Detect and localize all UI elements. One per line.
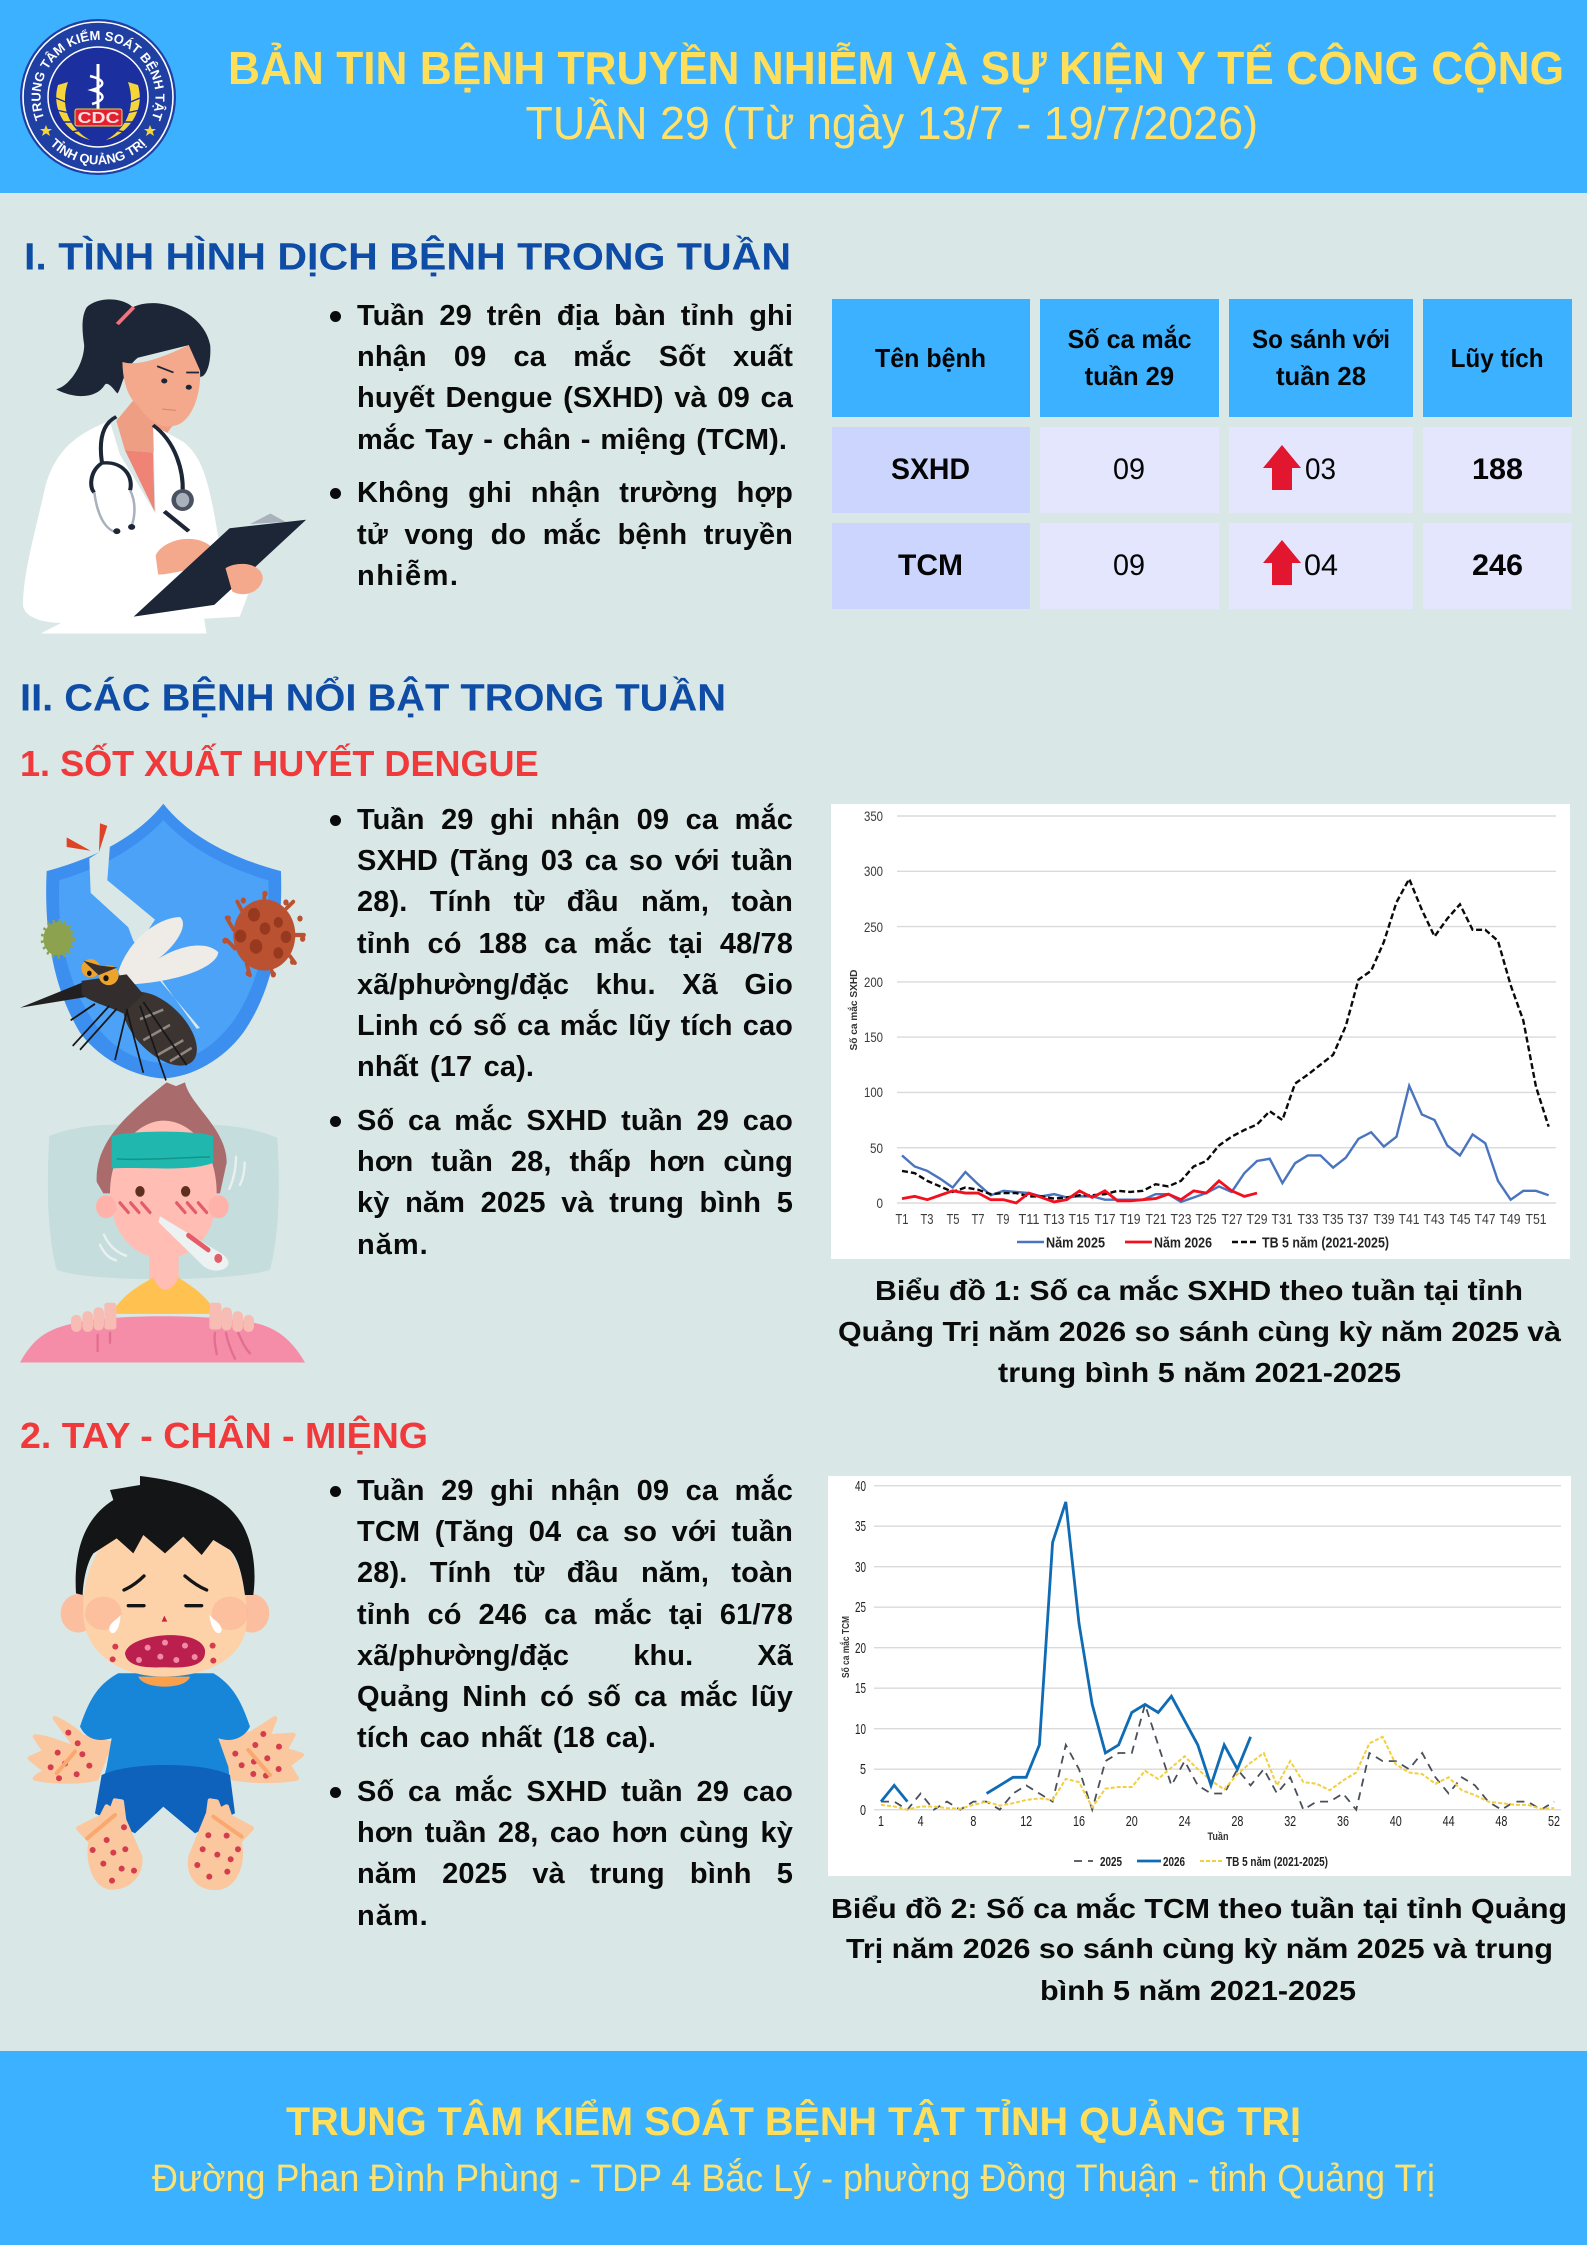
text block: weekly situation [330,300,794,592]
chart 1: SXHD weekly cases: 250 [864,919,883,935]
chart 1: SXHD weekly cases: 300 [864,863,883,879]
text block: hand foot mouth: tích cao nhất (18 ca). [357,1722,656,1754]
text block: dengue: hơn tuần 28, thấp hơn cùng [357,1146,793,1178]
chart 2: TCM weekly cases: 1 [878,1814,884,1830]
logo: CDC Quang Tri: CDC [78,110,120,127]
chart 1: SXHD weekly cases: T45 [1450,1211,1470,1228]
chart 1: SXHD weekly cases: 350 [864,808,883,824]
chart 1: SXHD weekly cases: T33 [1298,1211,1318,1228]
chart 2: TCM weekly cases: 20 [1126,1814,1138,1830]
chart 1: SXHD weekly cases: T17 [1094,1211,1116,1228]
chart 1: SXHD weekly cases: 50 [870,1140,883,1156]
text block: dengue: Tuần 29 ghi nhận 09 ca mắc [357,804,793,836]
chart 2: TCM weekly cases: 12 [1020,1814,1032,1830]
chart 2: TCM weekly cases: 24 [1179,1814,1191,1830]
footer: address: Đường Phan Đình Phùng - TDP 4 Bắc Lý - phường Đồng Thuận - tỉnh Quảng Trị [152,2157,1435,2200]
chart 2: TCM weekly cases: 44 [1443,1814,1455,1830]
table row: TCM [898,540,1523,585]
table row: SXHD: 09 [1113,453,1145,486]
text block: dengue: năm. [357,1229,429,1261]
caption: chart 1: Biểu đồ 1: Số ca mắc SXHD theo tuần tại tỉnh [875,1275,1523,1306]
chart 1: SXHD weekly cases [831,804,1570,1259]
table body cells [832,427,1572,609]
chart 1: SXHD weekly cases: T51 [1526,1211,1546,1228]
legend: chart 2 [1074,1854,1328,1869]
text block: hand foot mouth: TCM (Tăng 04 ca so với tuần [357,1516,793,1548]
text block: hand foot mouth: năm 2025 và trung bình 5 [357,1858,793,1890]
chart 1: SXHD weekly cases: T27 [1222,1211,1242,1228]
chart 2: TCM weekly cases: 25 [855,1600,866,1616]
caption: chart 1: trung bình 5 năm 2021-2025 [998,1357,1401,1388]
footer band [0,2051,1587,2245]
chart 1: SXHD weekly cases: T23 [1170,1211,1192,1228]
table header labels: tuần 29 [1085,361,1174,391]
chart 1: SXHD weekly cases: T21 [1146,1211,1166,1228]
chart 1: SXHD weekly cases: T7 [972,1211,984,1228]
chart 1: SXHD weekly cases: T37 [1348,1211,1368,1228]
table header labels: tuần 28 [1276,361,1366,391]
chart 2: TCM weekly cases: Tuần [1208,1831,1229,1843]
header band [0,0,1587,193]
table row: SXHD: SXHD [891,453,970,486]
text block: weekly situation: nhận 09 ca mắc Sốt xuất [357,341,793,373]
text block: dengue: Số ca mắc SXHD tuần 29 cao [357,1105,793,1137]
text block: hand foot mouth: 28). Tính từ đầu năm, toàn [357,1557,793,1589]
chart 1: SXHD weekly cases: T25 [1196,1211,1216,1228]
text block: dengue [330,803,793,1261]
logo: CDC Quang Tri: TRUNG TÂM KIỂM SOÁT BỆNH TẬT [32,29,166,122]
chart 2: TCM weekly cases: 40 [855,1479,866,1495]
caption: chart 2: bình 5 năm 2021-2025 [1040,1975,1356,2006]
caption: chart 2: Trị năm 2026 so sánh cùng kỳ năm 2025 và trung [846,1933,1553,1964]
text block: dengue: nhất (17 ca). [357,1051,534,1083]
table header labels: Lũy tích [1451,343,1544,373]
legend: chart 1: Năm 2026 [1154,1236,1212,1252]
chart 2: TCM weekly cases: 4 [918,1814,924,1830]
caption: chart 2 [831,1893,1567,2006]
table header labels: Số ca mắc [1068,324,1192,354]
text block: dengue: SXHD (Tăng 03 ca so với tuần [357,845,793,877]
chart 1: SXHD weekly cases: 150 [864,1029,883,1045]
text block: hand foot mouth [330,1474,793,1932]
text block: weekly situation: Tuần 29 trên địa bàn tỉnh ghi [357,300,793,332]
table row: SXHD: 03 [1305,453,1336,486]
text block: hand foot mouth: Tuần 29 ghi nhận 09 ca mắc [357,1475,793,1507]
chart 1: SXHD weekly cases: T9 [996,1211,1010,1228]
heading: hand foot mouth: 2. TAY - CHÂN - MIỆNG [20,1414,428,1456]
chart 2: TCM weekly cases: 8 [970,1814,976,1830]
chart 2: TCM weekly cases: 0 [860,1803,866,1819]
heading: section I: I. TÌNH HÌNH DỊCH BỆNH TRONG TUẦN [24,234,791,278]
legend: chart 1 [1017,1236,1389,1252]
table header labels [875,324,1544,391]
text block: hand foot mouth: Quảng Ninh có số ca mắc lũy [357,1681,793,1713]
chart 1: SXHD weekly cases: T41 [1398,1211,1420,1228]
chart 2: TCM weekly cases: 28 [1231,1814,1243,1830]
heading: dengue: 1. SỐT XUẤT HUYẾT DENGUE [20,742,539,784]
footer: organisation name: TRUNG TÂM KIỂM SOÁT BỆNH TẬT TỈNH QUẢNG TRỊ [286,2097,1301,2144]
caption: chart 2: Biểu đồ 2: Số ca mắc TCM theo tuần tại tỉnh Quảng [831,1893,1567,1924]
illustration: doctor [23,299,306,633]
text block: hand foot mouth: tỉnh có 246 ca mắc tại 61/78 [357,1599,793,1631]
table row: SXHD: 188 [1472,453,1523,486]
chart 1: SXHD weekly cases: T19 [1120,1211,1140,1228]
chart 2: TCM weekly cases: 32 [1284,1814,1296,1830]
icon: red up arrow [1263,540,1301,585]
text block: hand foot mouth: năm. [357,1900,429,1932]
text block: dengue: tỉnh có 188 ca mắc tại 48/78 [357,928,793,960]
table header labels: So sánh với [1252,324,1390,354]
chart 1: SXHD weekly cases: T15 [1068,1211,1090,1228]
chart 2: TCM weekly cases: 16 [1073,1814,1085,1830]
legend: chart 2: 2026 [1163,1854,1185,1869]
chart 2: TCM weekly cases: 36 [1337,1814,1349,1830]
chart 1: SXHD weekly cases: T11 [1018,1211,1040,1228]
caption: chart 1 [838,1275,1561,1388]
text block: weekly situation: mắc Tay - chân - miệng (TCM). [357,424,787,456]
text block: dengue: 28). Tính từ đầu năm, toàn [357,886,793,918]
illustration: sick boy [30,1476,302,1888]
chart 1: SXHD weekly cases: Số ca mắc SXHD [847,969,860,1050]
chart 1: SXHD weekly cases: T1 [896,1211,908,1228]
chart 1: SXHD weekly cases: T5 [946,1211,960,1228]
text block: hand foot mouth: Số ca mắc SXHD tuần 29 cao [357,1776,793,1808]
table row: TCM: 246 [1472,549,1523,582]
title: BẢN TIN BỆNH TRUYỀN NHIỄM VÀ SỰ KIỆN Y TẾ CÔNG CỘNG [228,42,1564,94]
chart 1: SXHD weekly cases: T29 [1246,1211,1268,1228]
heading: section II: II. CÁC BỆNH NỔI BẬT TRONG TUẦN [20,674,726,720]
chart 2: TCM weekly cases: 48 [1495,1814,1507,1830]
subtitle: week: TUẦN 29 (Từ ngày 13/7 - 19/7/2026) [526,97,1258,149]
chart 2: TCM weekly cases: Số ca mắc TCM [839,1616,852,1678]
chart 2: TCM weekly cases: 5 [860,1762,866,1778]
text block: hand foot mouth: xã/phường/đặc khu. Xã [357,1640,793,1672]
legend: chart 2: 2025 [1100,1854,1122,1869]
table row: TCM: 04 [1304,549,1338,582]
text block: dengue: xã/phường/đặc khu. Xã Gio [357,969,793,1001]
chart 1: SXHD weekly cases: 100 [864,1084,883,1100]
chart 1: SXHD weekly cases: T3 [920,1211,934,1228]
chart 1: SXHD weekly cases: 200 [864,974,883,990]
caption: chart 1: Quảng Trị năm 2026 so sánh cùng kỳ năm 2025 và [838,1316,1561,1347]
text block: weekly situation: Không ghi nhận trường hợp [357,477,793,509]
chart 1: SXHD weekly cases: T35 [1322,1211,1344,1228]
chart 1: SXHD weekly cases: T31 [1272,1211,1292,1228]
chart 1: SXHD weekly cases: T49 [1500,1211,1520,1228]
table row: SXHD [891,445,1523,490]
table row: TCM: TCM [898,549,963,582]
legend: chart 1: Năm 2025 [1046,1236,1105,1252]
chart 1: SXHD weekly cases: T47 [1474,1211,1496,1228]
chart 1: SXHD weekly cases: 0 [876,1195,883,1211]
text block: dengue: Linh có số ca mắc lũy tích cao [357,1010,793,1042]
table header labels: Tên bệnh [875,343,986,373]
chart 2: TCM weekly cases: 52 [1548,1814,1560,1830]
logo: CDC Quang Tri: TỈNH QUẢNG TRỊ [52,138,148,166]
text block: weekly situation: huyết Dengue (SXHD) và 09 ca [357,382,793,414]
illustration: mosquito on shield [20,804,305,1362]
logo: CDC Quang Tri [20,19,176,175]
chart 2: TCM weekly cases: 20 [855,1641,866,1657]
chart 2: TCM weekly cases: 15 [855,1681,866,1697]
chart 2: TCM weekly cases: 30 [855,1560,866,1576]
chart 2: TCM weekly cases [828,1476,1571,1876]
text block: dengue: kỳ năm 2025 và trung bình 5 [357,1187,793,1219]
legend: chart 1: TB 5 năm (2021-2025) [1262,1236,1389,1252]
chart 1: SXHD weekly cases: T43 [1424,1211,1444,1228]
icon: red up arrow [1263,445,1301,490]
chart 2: TCM weekly cases: 40 [1390,1814,1402,1830]
text block: weekly situation: tử vong do mắc bệnh truyền [357,519,793,551]
chart 1: SXHD weekly cases: T13 [1044,1211,1064,1228]
table header cells [832,299,1572,417]
table row: TCM: 09 [1113,549,1145,582]
chart 2: TCM weekly cases: 35 [855,1519,866,1535]
chart 2: TCM weekly cases: 10 [855,1722,866,1738]
legend: chart 2: TB 5 năm (2021-2025) [1226,1854,1328,1869]
chart 1: SXHD weekly cases: T39 [1374,1211,1394,1228]
text block: weekly situation: nhiễm. [357,560,459,592]
text block: hand foot mouth: hơn tuần 28, cao hơn cùng kỳ [357,1817,793,1849]
